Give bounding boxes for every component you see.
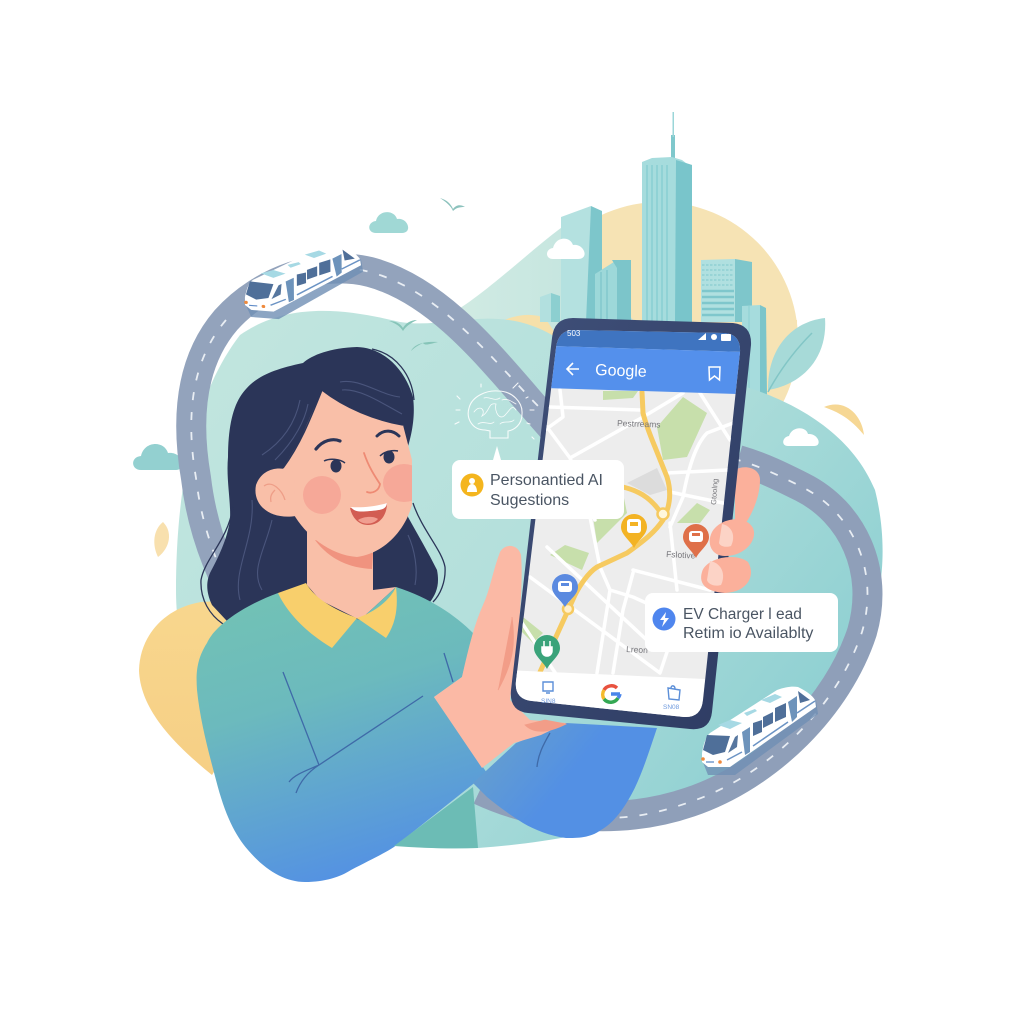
woman character bbox=[197, 347, 657, 882]
building: short tower bbox=[595, 260, 631, 322]
nav: left icon and label bbox=[541, 682, 556, 705]
cheeks bbox=[303, 464, 412, 514]
leaf: yellow left bbox=[154, 522, 169, 557]
map route bbox=[540, 392, 670, 672]
icon: AI brain bbox=[455, 383, 534, 439]
neck bbox=[307, 530, 396, 620]
sweater fold lines bbox=[283, 653, 550, 793]
train: top left bbox=[244, 238, 364, 326]
nav: left icon and label: SIN8 bbox=[541, 698, 556, 705]
bottom navigation bbox=[516, 670, 705, 717]
leaf: yellow right bbox=[824, 405, 864, 435]
callout: EV charger availability bbox=[645, 593, 838, 652]
building: left tower bbox=[561, 206, 602, 322]
bird: lower bbox=[411, 342, 438, 351]
map labels: Pestrreams bbox=[617, 418, 661, 430]
road: upper left loop bbox=[191, 267, 556, 615]
map grey block bbox=[627, 468, 667, 495]
sweater right sleeve bbox=[473, 723, 657, 838]
main mint background blob bbox=[176, 311, 883, 848]
callout: personalized AI suggestions: Sugestions bbox=[490, 492, 569, 509]
neck shadow bbox=[315, 540, 373, 569]
building: far left low bbox=[540, 293, 560, 322]
icon: back arrow bbox=[567, 363, 579, 375]
building: right low tower bbox=[742, 305, 767, 395]
phone status bar bbox=[556, 330, 740, 352]
finger: index bbox=[710, 519, 754, 556]
bird: top bbox=[440, 198, 465, 211]
background: mint hill behind buildings bbox=[440, 225, 640, 340]
infographic illustration bbox=[133, 112, 883, 882]
phone screen map bbox=[516, 330, 740, 717]
nose bbox=[364, 453, 380, 493]
callout: personalized AI suggestions: Personantied AI bbox=[490, 472, 603, 489]
map waypoints bbox=[658, 508, 668, 520]
nav: right icon and label: SN08 bbox=[663, 704, 680, 711]
hand: palm crease bbox=[498, 617, 566, 731]
background: small yellow hill bbox=[480, 315, 560, 350]
cloud: white skyline bbox=[547, 239, 585, 259]
map white roads bbox=[520, 390, 733, 680]
map labels: Gtoolng bbox=[709, 478, 720, 505]
phone frame bbox=[511, 318, 751, 729]
app title: Google bbox=[595, 362, 647, 381]
finger: behind phone top bbox=[735, 467, 760, 535]
hand: palm and thumb behind phone bbox=[434, 546, 566, 768]
cloud: top teal bbox=[369, 212, 408, 233]
background: yellow sun bbox=[522, 202, 798, 478]
bird: middle bbox=[389, 320, 417, 331]
callout: EV charger availability: Retim io Availablty bbox=[683, 625, 813, 642]
phone bbox=[500, 318, 751, 729]
icon: yellow person bbox=[460, 474, 484, 496]
cloud: white right bbox=[783, 428, 819, 446]
road: lower right loop bbox=[480, 460, 867, 818]
hair outline strand bbox=[201, 349, 445, 624]
cloud: left teal bbox=[133, 444, 183, 470]
finger: middle bbox=[701, 557, 751, 593]
eyes and brows bbox=[316, 431, 399, 472]
ear bbox=[255, 468, 296, 517]
status icons bbox=[698, 333, 731, 341]
map labels bbox=[617, 418, 720, 655]
callout: personalized AI suggestions bbox=[452, 446, 624, 519]
sweater hem bbox=[394, 787, 478, 848]
status time: 503 bbox=[567, 329, 581, 338]
mouth bbox=[350, 503, 387, 525]
pin: orange car bbox=[683, 524, 709, 558]
pin: yellow car bbox=[621, 514, 647, 548]
callout: EV charger availability: EV Charger l ead bbox=[683, 606, 802, 623]
building: right windowed tower bbox=[701, 259, 752, 322]
bottom-left yellow blob bbox=[139, 600, 260, 775]
map labels: Fslotive bbox=[666, 549, 696, 561]
pin: green charger bbox=[534, 635, 560, 669]
pin: blue car bbox=[552, 574, 578, 607]
hair strands bbox=[238, 381, 416, 600]
hair bbox=[207, 347, 438, 640]
background: yellow sun lower part bbox=[700, 300, 797, 405]
icon: blue charger bbox=[652, 608, 676, 630]
collar bbox=[278, 583, 397, 648]
phone app bar bbox=[545, 346, 745, 394]
train: bottom right bbox=[701, 687, 818, 775]
map labels: Lreon bbox=[626, 644, 648, 655]
face bbox=[283, 390, 412, 557]
city skyline bbox=[540, 112, 767, 395]
sweater body bbox=[197, 587, 487, 882]
leaf: large teal bbox=[768, 318, 825, 392]
map green parks bbox=[517, 391, 710, 643]
icon: bookmark bbox=[709, 367, 720, 380]
building: tall central tower bbox=[642, 112, 692, 322]
nav: right icon and label bbox=[663, 686, 680, 711]
nav: Google G logo bbox=[603, 686, 620, 702]
